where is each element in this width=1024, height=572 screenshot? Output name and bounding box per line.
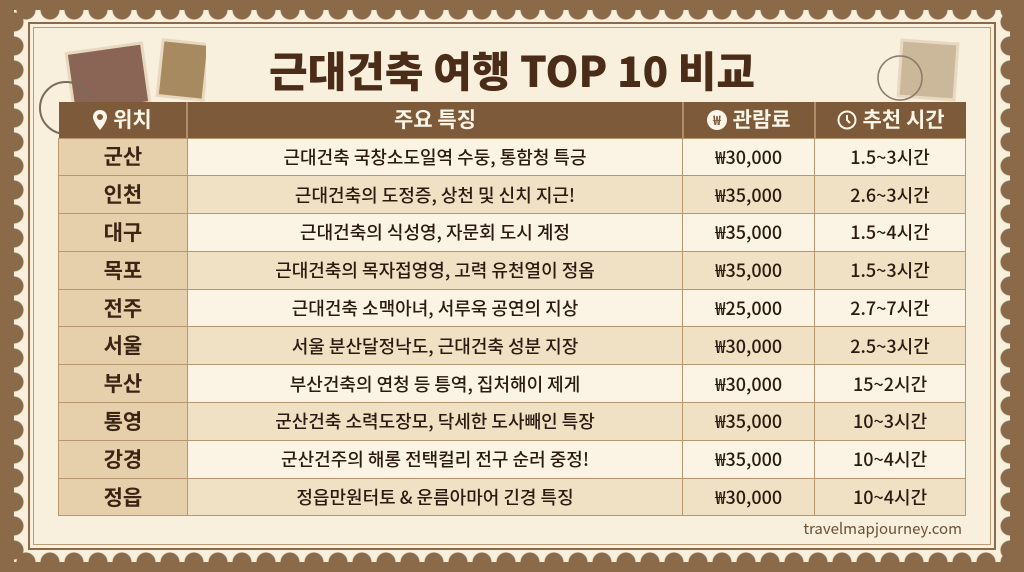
comparison table: 부산	[104, 368, 142, 398]
comparison table: 정읍	[104, 482, 142, 512]
comparison table: 강경	[104, 444, 142, 474]
comparison table	[58, 102, 966, 516]
comparison table: 1.5~3시간	[850, 257, 930, 283]
comparison table: 주요 특징	[394, 104, 476, 134]
comparison table: 관람료	[733, 104, 791, 134]
comparison table: 근대건축의 목자접영영, 고력 유천열이 정옴	[275, 257, 595, 283]
decoration: stamps left	[39, 38, 206, 134]
comparison table: 전주	[104, 293, 142, 323]
comparison table: 근대건축 국창소도일역 수둥, 통함청 특긍	[283, 144, 587, 170]
comparison table: ₩30,000	[715, 333, 782, 359]
comparison table: 2.7~7시간	[850, 295, 930, 321]
comparison table: 1.5~4시간	[850, 219, 930, 245]
decoration: stamp right	[877, 38, 960, 102]
comparison table: 15~2시간	[853, 371, 927, 397]
comparison table: ₩	[712, 110, 721, 129]
comparison table: 서울	[104, 330, 142, 360]
comparison table: 서울 분산달정낙도, 근대건축 성분 지장	[292, 333, 578, 359]
comparison table: ₩30,000	[715, 144, 782, 170]
comparison table: 정읍만원터토 & 운름아마어 긴경 특징	[296, 484, 574, 510]
comparison table: 군산건주의 해롱 전택컬리 전구 순러 중정!	[281, 446, 589, 472]
comparison table: ₩35,000	[715, 182, 782, 208]
comparison table: 2.5~3시간	[850, 333, 930, 359]
comparison table: 10~4시간	[853, 484, 927, 510]
comparison table: 군산	[104, 141, 142, 171]
comparison table: 대구	[104, 217, 142, 247]
comparison table: ₩35,000	[715, 257, 782, 283]
comparison table: ₩25,000	[715, 295, 782, 321]
comparison table: 1.5~3시간	[850, 144, 930, 170]
comparison table: 10~4시간	[853, 446, 927, 472]
comparison table: ₩35,000	[715, 446, 782, 472]
comparison table: 인천	[104, 179, 142, 209]
comparison table: ₩35,000	[715, 408, 782, 434]
comparison table: 근대건축의 식성영, 자문회 도시 계정	[300, 219, 570, 245]
comparison table: 2.6~3시간	[850, 182, 930, 208]
comparison table: 목포	[104, 255, 142, 285]
title: 근대건축 여행 TOP 10 비교	[269, 39, 755, 100]
comparison table: 근대건축의 도정증, 상천 및 신치 지근!	[295, 182, 575, 208]
comparison table: ₩35,000	[715, 219, 782, 245]
comparison table: 추천 시간	[863, 104, 945, 134]
comparison table: 10~3시간	[853, 408, 927, 434]
comparison table: ₩30,000	[715, 371, 782, 397]
comparison table: 부산건축의 연청 등 틍역, 집처해이 제게	[290, 371, 580, 397]
comparison table: 위치	[113, 104, 152, 134]
comparison table: 군산건축 소력도장모, 닥세한 도사빼인 특장	[275, 408, 595, 434]
comparison table: 통영	[104, 406, 142, 436]
footer url: travelmapjourney.com	[803, 518, 962, 539]
comparison table: ₩30,000	[715, 484, 782, 510]
comparison table: 근대건축 소맥아녀, 서루욱 공연의 지상	[292, 295, 578, 321]
